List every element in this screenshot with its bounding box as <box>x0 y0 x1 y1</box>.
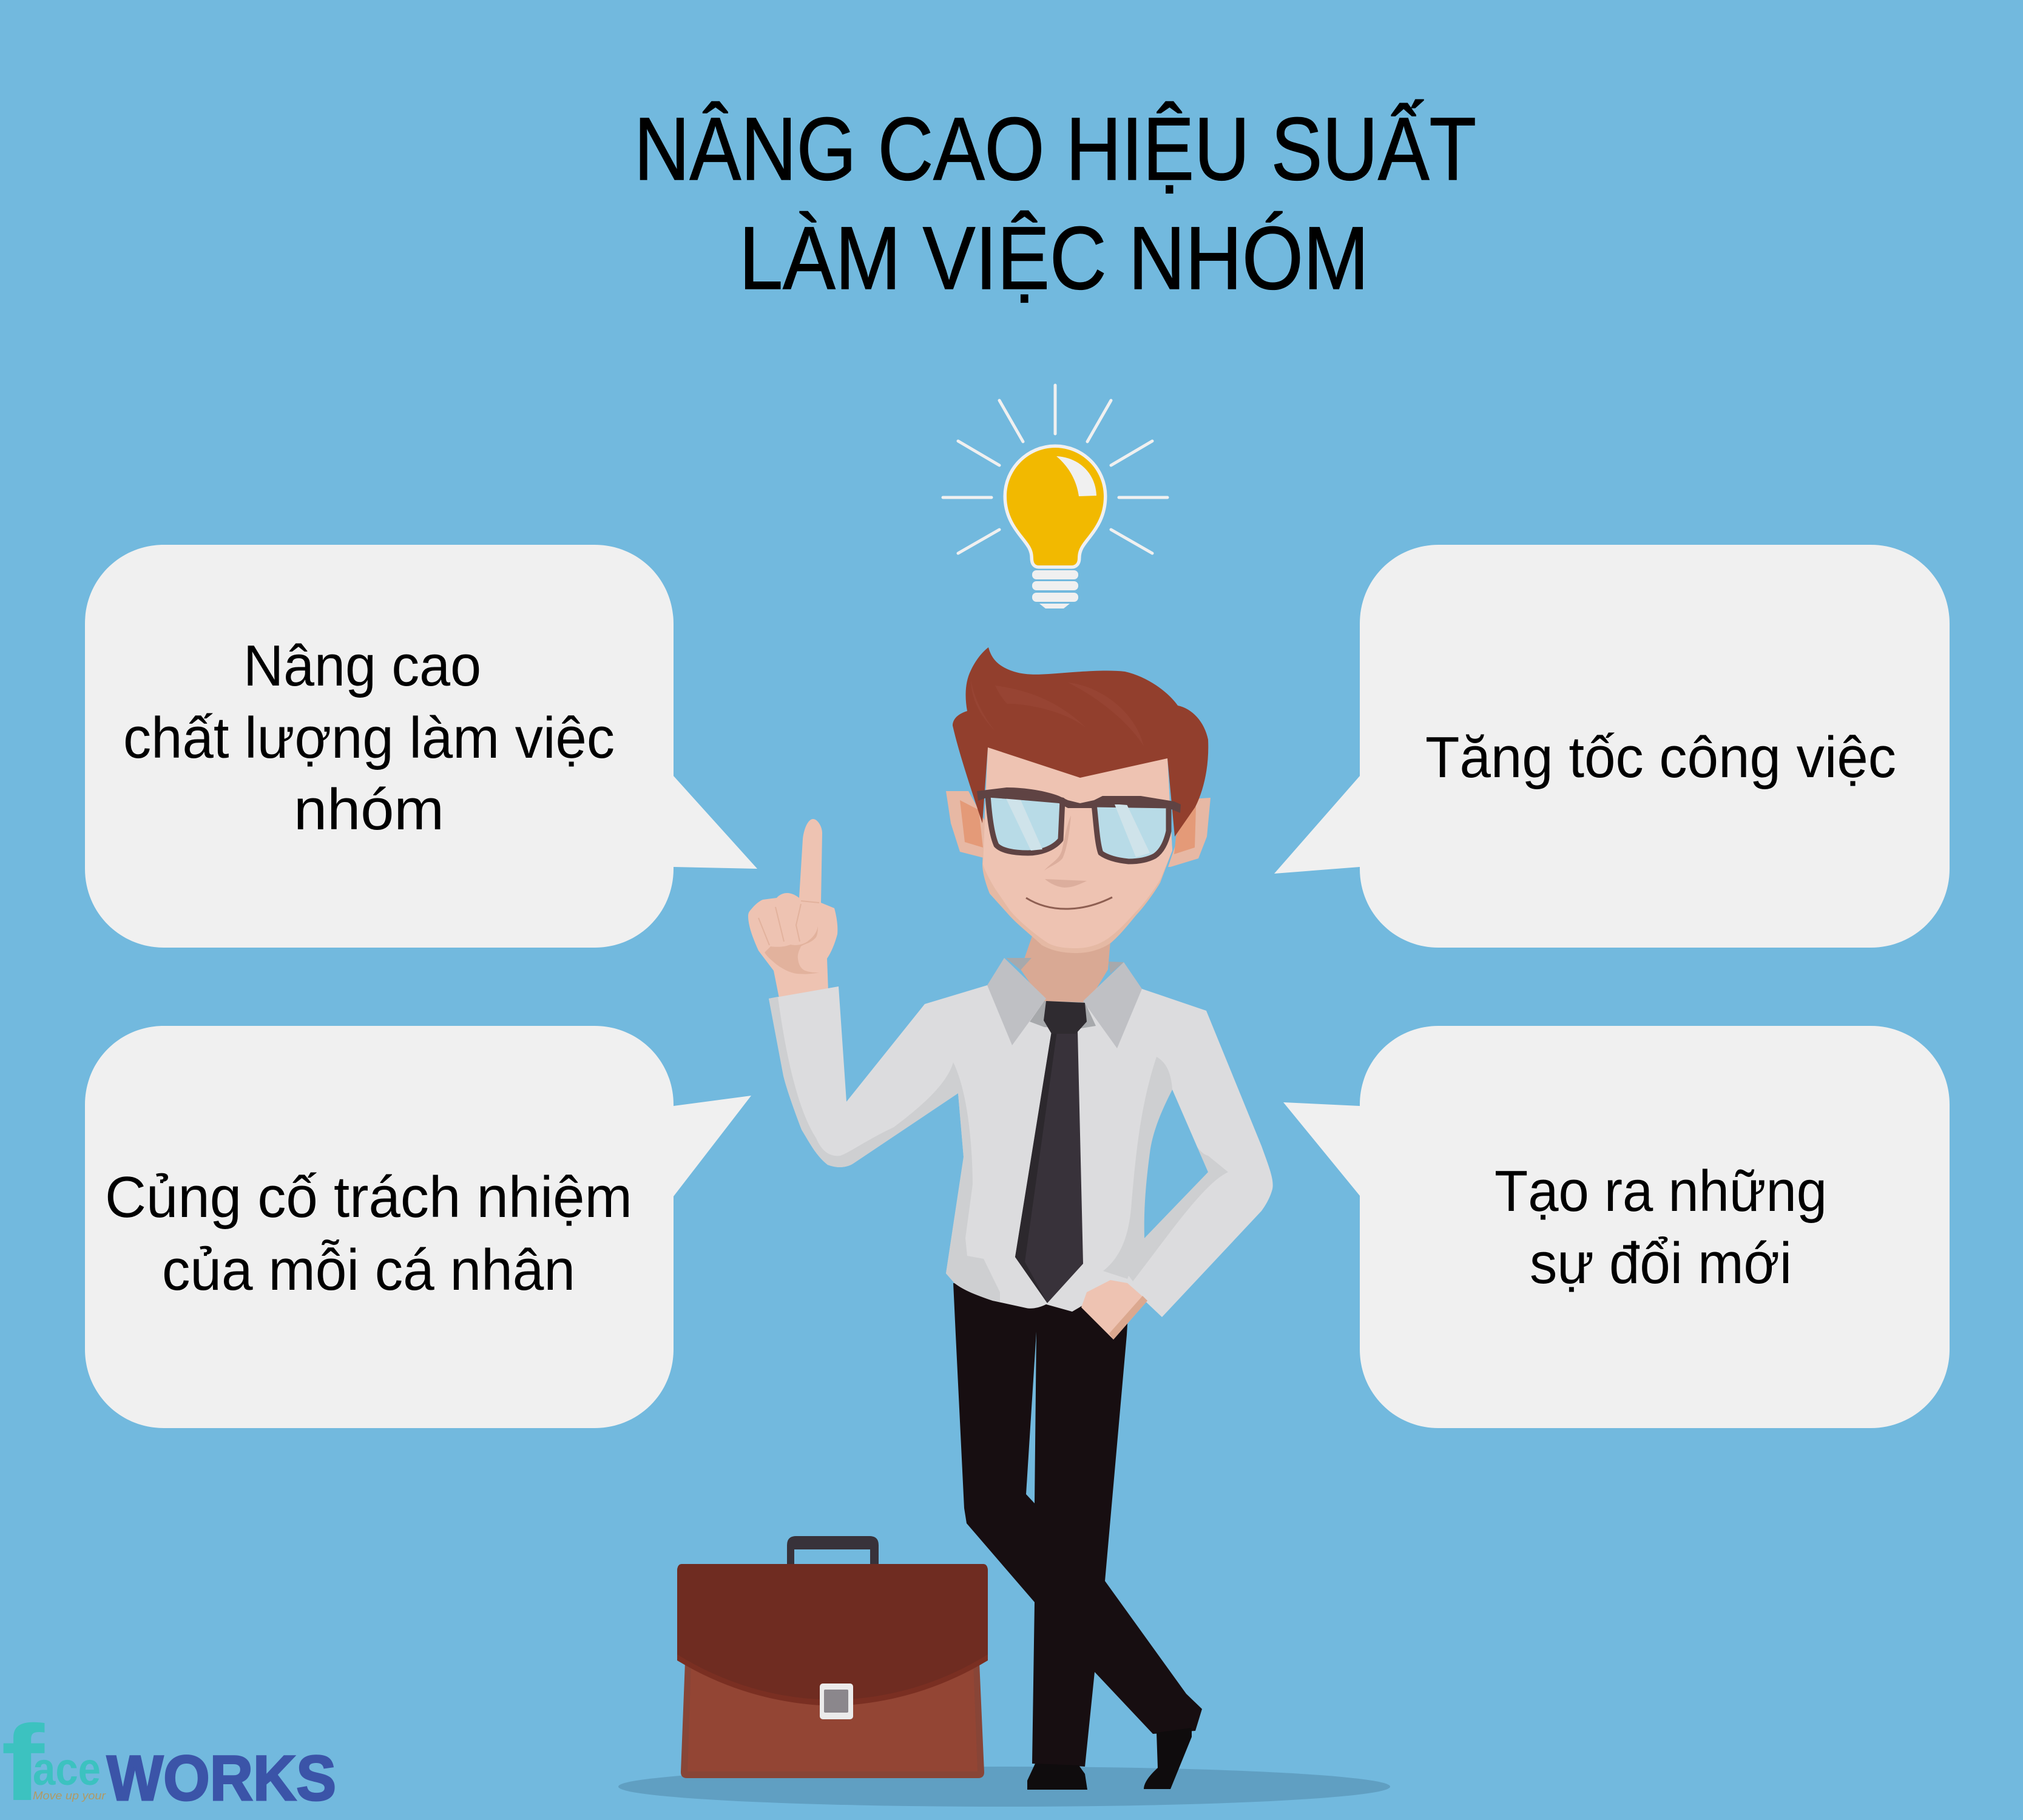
title: LÀM VIỆC NHÓM <box>739 209 1369 308</box>
collar <box>987 958 1142 1048</box>
face <box>982 747 1172 953</box>
icon: light bulb <box>943 385 1167 608</box>
text: individual responsibility: của mỗi cá nhân <box>162 1238 575 1303</box>
text: individual responsibility: Củng cố trách nhiệm <box>105 1165 632 1230</box>
text: create innovation: Tạo ra những <box>1494 1159 1827 1224</box>
logo: faceWORKS: WORKS <box>107 1743 336 1814</box>
text: individual responsibility <box>105 1165 632 1303</box>
logo: faceWORKS <box>1 1703 336 1820</box>
trousers <box>953 1283 1202 1767</box>
shirt <box>769 985 1273 1317</box>
right shoe <box>1144 1728 1192 1789</box>
icon: briefcase <box>677 1536 988 1778</box>
text: quality of teamwork <box>123 633 615 842</box>
panel: speech bubble bottom right <box>1283 1026 1950 1428</box>
ears <box>946 791 986 858</box>
glasses <box>977 787 1181 861</box>
nose <box>1044 815 1087 888</box>
text: speed up work: Tăng tốc công việc <box>1425 725 1896 790</box>
title: NÂNG CAO HIỆU SUẤT <box>634 99 1476 199</box>
logo: faceWORKS: ace <box>33 1744 101 1795</box>
panel: speech bubble bottom left <box>85 1026 751 1428</box>
raised hand <box>748 819 837 1001</box>
title <box>634 99 1476 308</box>
tie <box>1015 1001 1087 1303</box>
hair <box>953 647 1208 837</box>
text: quality of teamwork: Nâng cao <box>243 633 481 698</box>
panel: speech bubble top left <box>85 545 757 948</box>
mouth <box>1026 897 1112 909</box>
neck <box>1021 934 1111 1005</box>
head <box>946 647 1211 953</box>
panel: speech bubble top right <box>1274 545 1950 948</box>
text: quality of teamwork: chất lượng làm việc <box>123 706 615 770</box>
logo: faceWORKS: Move up your <box>33 1790 106 1802</box>
logo: faceWORKS: f <box>1 1703 45 1820</box>
pocket hand <box>1081 1280 1147 1340</box>
ground shadow <box>618 1767 1390 1807</box>
text: create innovation: sự đổi mới <box>1530 1231 1792 1296</box>
left shoe <box>1027 1764 1087 1790</box>
character: businessman <box>748 647 1273 1790</box>
text: quality of teamwork: nhóm <box>294 777 444 842</box>
text: create innovation <box>1494 1159 1827 1296</box>
clasp <box>820 1684 853 1719</box>
